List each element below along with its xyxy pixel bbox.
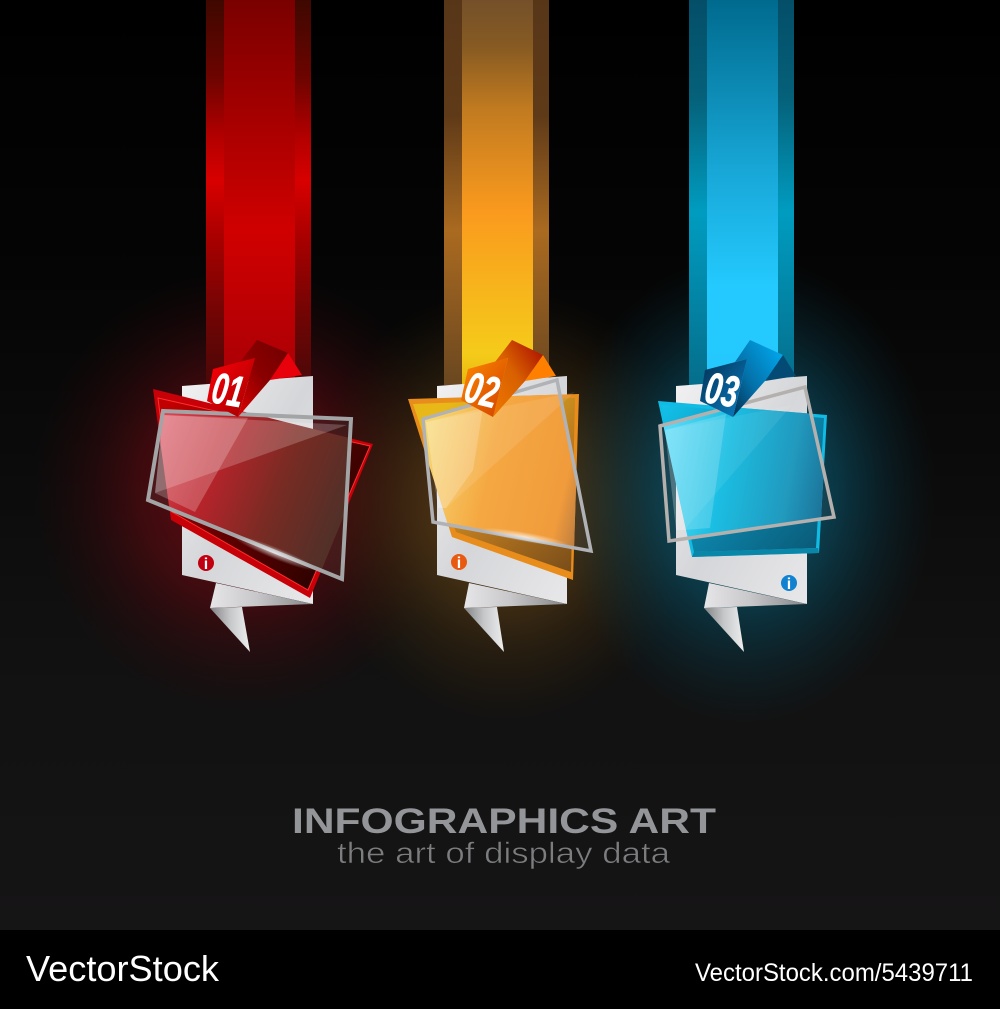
paper banner 03 xyxy=(676,376,807,652)
number tag 01: 01 xyxy=(208,364,247,417)
number tag 01 xyxy=(207,340,302,417)
paper banner 02 xyxy=(437,376,567,652)
number tag 02 xyxy=(460,340,556,418)
icon: info 02: i xyxy=(457,555,461,572)
stripe: blue xyxy=(689,0,794,385)
glow: red xyxy=(30,265,460,715)
icon: info 01: i xyxy=(204,556,208,573)
footer logo text: VectorStock xyxy=(26,948,220,989)
title: INFOGRAPHICS ART xyxy=(292,802,716,841)
panel: card 02 xyxy=(408,340,591,652)
glow: orange xyxy=(310,285,700,725)
icon: info 03 xyxy=(781,575,797,593)
icon: info 02 xyxy=(451,554,467,572)
back panel 01 xyxy=(153,389,373,598)
stripe: orange xyxy=(444,0,549,385)
icon: info 03: i xyxy=(787,576,791,593)
glass pane 03 xyxy=(658,387,834,557)
footer url text: VectorStock.com/5439711 xyxy=(695,959,973,987)
footer bar xyxy=(0,930,1000,1009)
number tag 02: 02 xyxy=(460,363,504,418)
number tag 03: 03 xyxy=(701,363,742,417)
glow: blue xyxy=(555,255,935,725)
subtitle: the art of display data xyxy=(337,837,670,870)
back panel 02 xyxy=(408,394,579,580)
back panel 03 xyxy=(658,401,827,557)
panel: card 01 xyxy=(148,340,373,652)
paper banner 01 xyxy=(182,376,313,652)
glass pane 02 xyxy=(421,378,594,554)
number tag 03 xyxy=(700,340,796,417)
glass pane 01 xyxy=(146,408,354,582)
icon: info 01 xyxy=(198,555,214,573)
stripe: red xyxy=(206,0,311,385)
panel: card 03 xyxy=(658,340,834,652)
